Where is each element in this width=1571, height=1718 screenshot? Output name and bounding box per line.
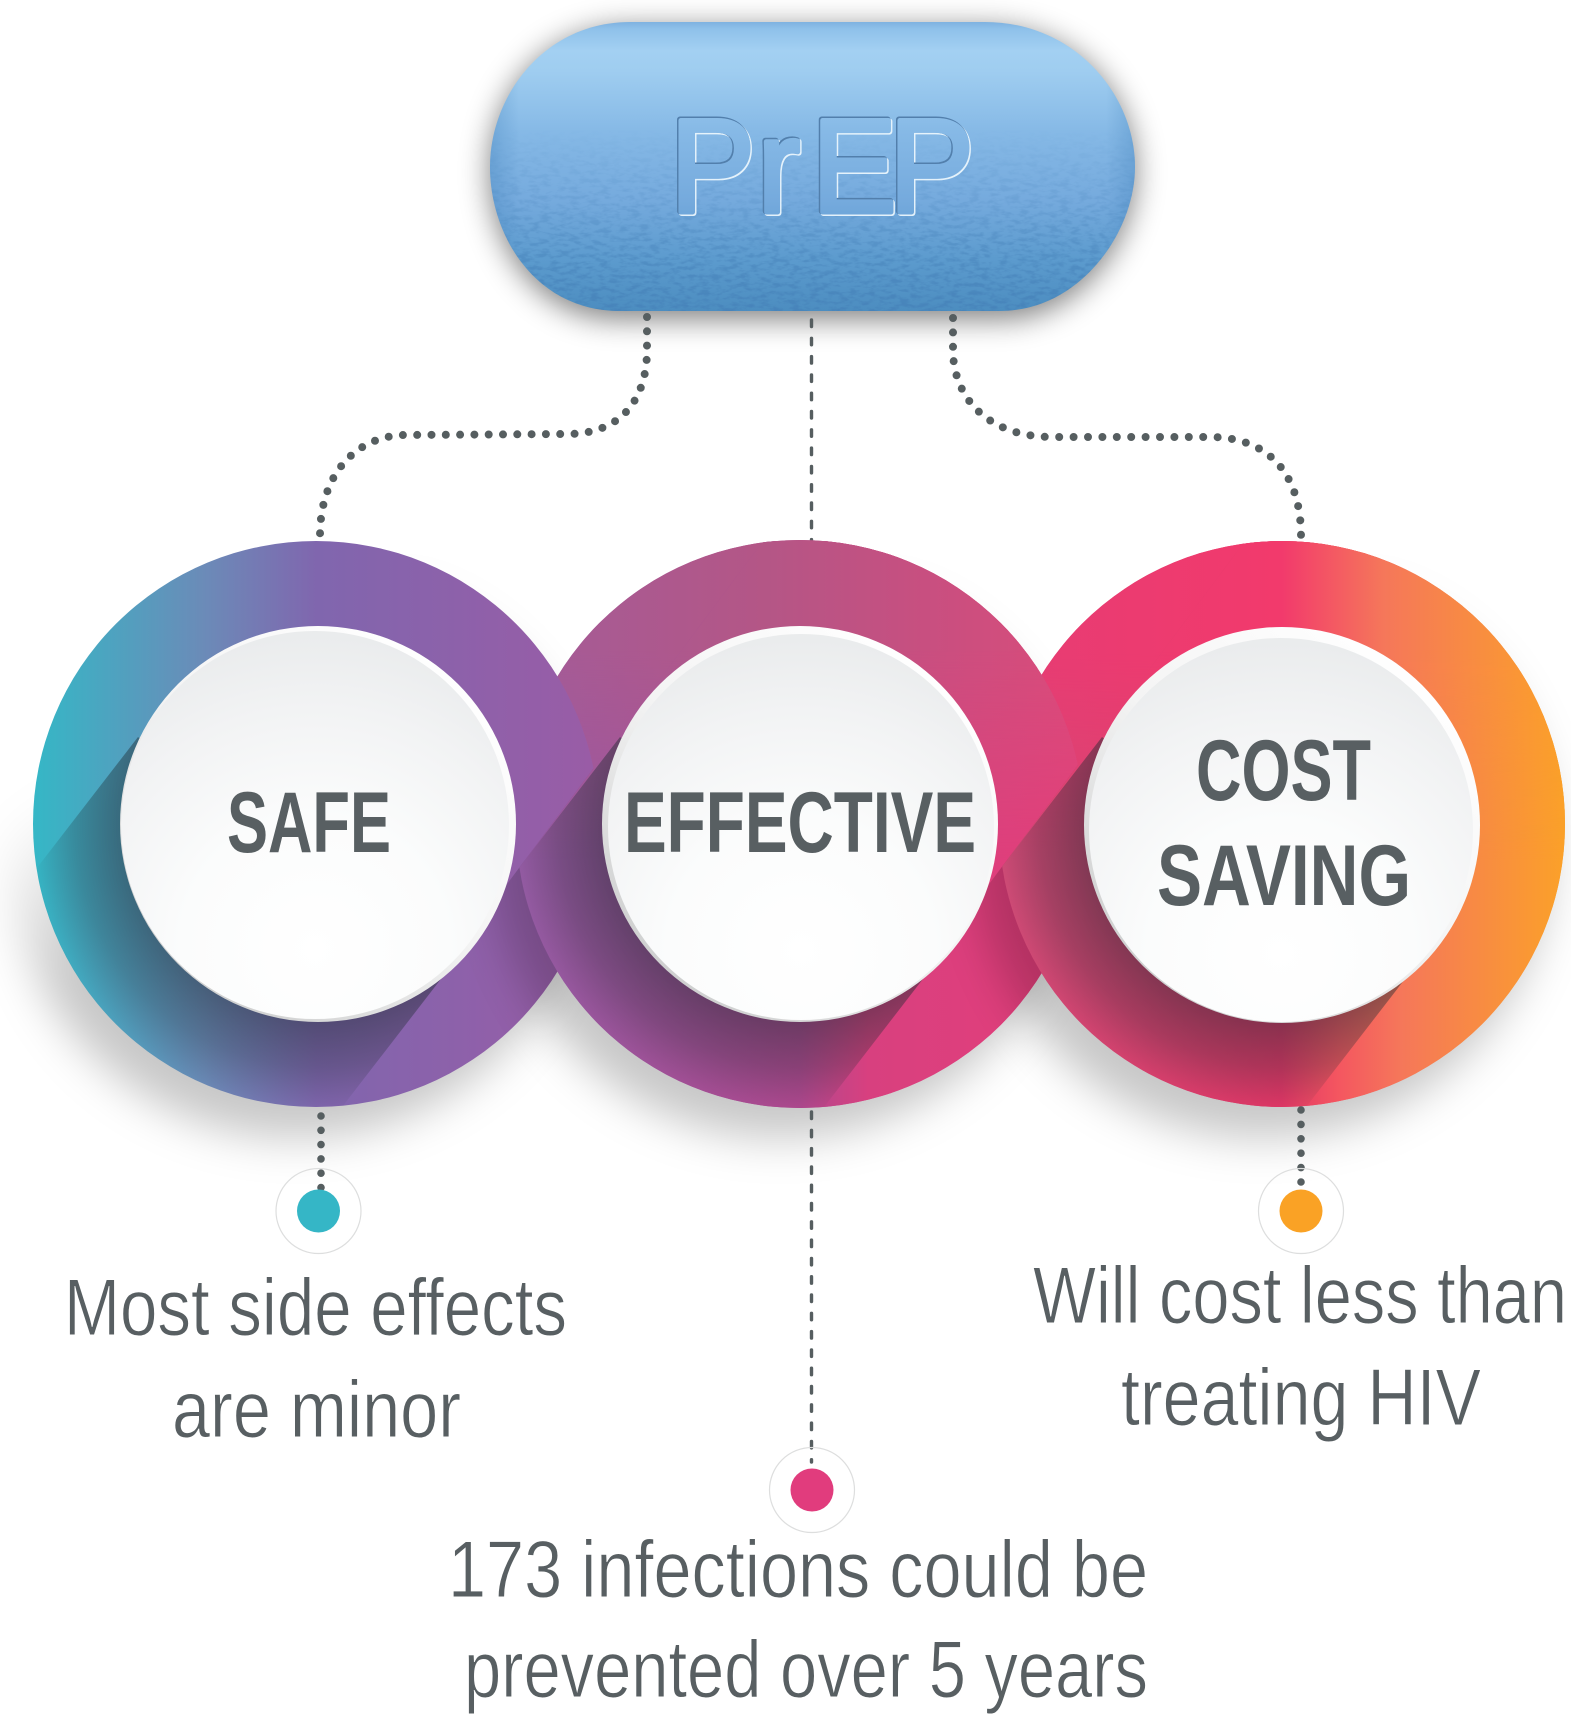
pill texture [490,22,1135,311]
heading: SAFE: SAFE [227,775,391,871]
text: infections prevented: 173 infections could be [448,1525,1148,1615]
pill: PrEP tablet [490,22,1135,319]
interlocking rings [33,540,1565,1108]
disc: SAFE [120,626,516,1022]
pill edge shading [490,22,1135,311]
pill shadow [490,28,1135,319]
connector: EFFECTIVE to marker [810,1112,813,1462]
heading: COST SAVING: SAVING [1157,828,1411,924]
marker: orange dot [1258,1168,1344,1254]
text: side effects [64,1263,567,1455]
heading: EFFECTIVE: EFFECTIVE [624,775,976,871]
text: cost [1033,1251,1567,1443]
embossed PrEP lettering: PrEP [671,94,975,242]
connector: COST SAVING to marker [1297,1110,1305,1190]
text: infections prevented [448,1525,1148,1715]
ring: cost saving base [999,541,1565,1107]
text: side effects: Most side effects [64,1263,567,1353]
embossed PrEP lettering: PrEP [670,92,973,240]
disc: COST SAVING [1084,627,1480,1023]
marker: teal dot [276,1168,361,1254]
long shadow: safe [42,737,441,1101]
long shadow: effective [526,737,923,1102]
ring: cost saving overlapping effective [974,541,1565,1138]
connector: pill to COST SAVING [953,318,1301,536]
ring: effective base [516,540,1084,1108]
ring: safe [33,541,599,1107]
connector: SAFE to marker [317,1116,325,1190]
long shadow: cost saving [1004,737,1403,1105]
marker: pink dot [770,1448,854,1532]
connector: pill to SAFE [320,317,647,536]
heading: COST SAVING: COST [1196,723,1371,819]
disc: EFFECTIVE [602,626,998,1022]
connector: pill to EFFECTIVE [810,320,813,540]
ring: effective overlapping safe [488,541,1042,1108]
heading: COST SAVING [1157,723,1411,924]
text: side effects: are minor [172,1365,461,1455]
text: infections prevented: prevented over 5 years [464,1625,1148,1715]
text: cost: treating HIV [1121,1353,1481,1443]
soft drop shadows under rings [8,562,1550,1138]
embossed PrEP lettering: PrEP [671,93,974,241]
pill body [490,22,1135,311]
